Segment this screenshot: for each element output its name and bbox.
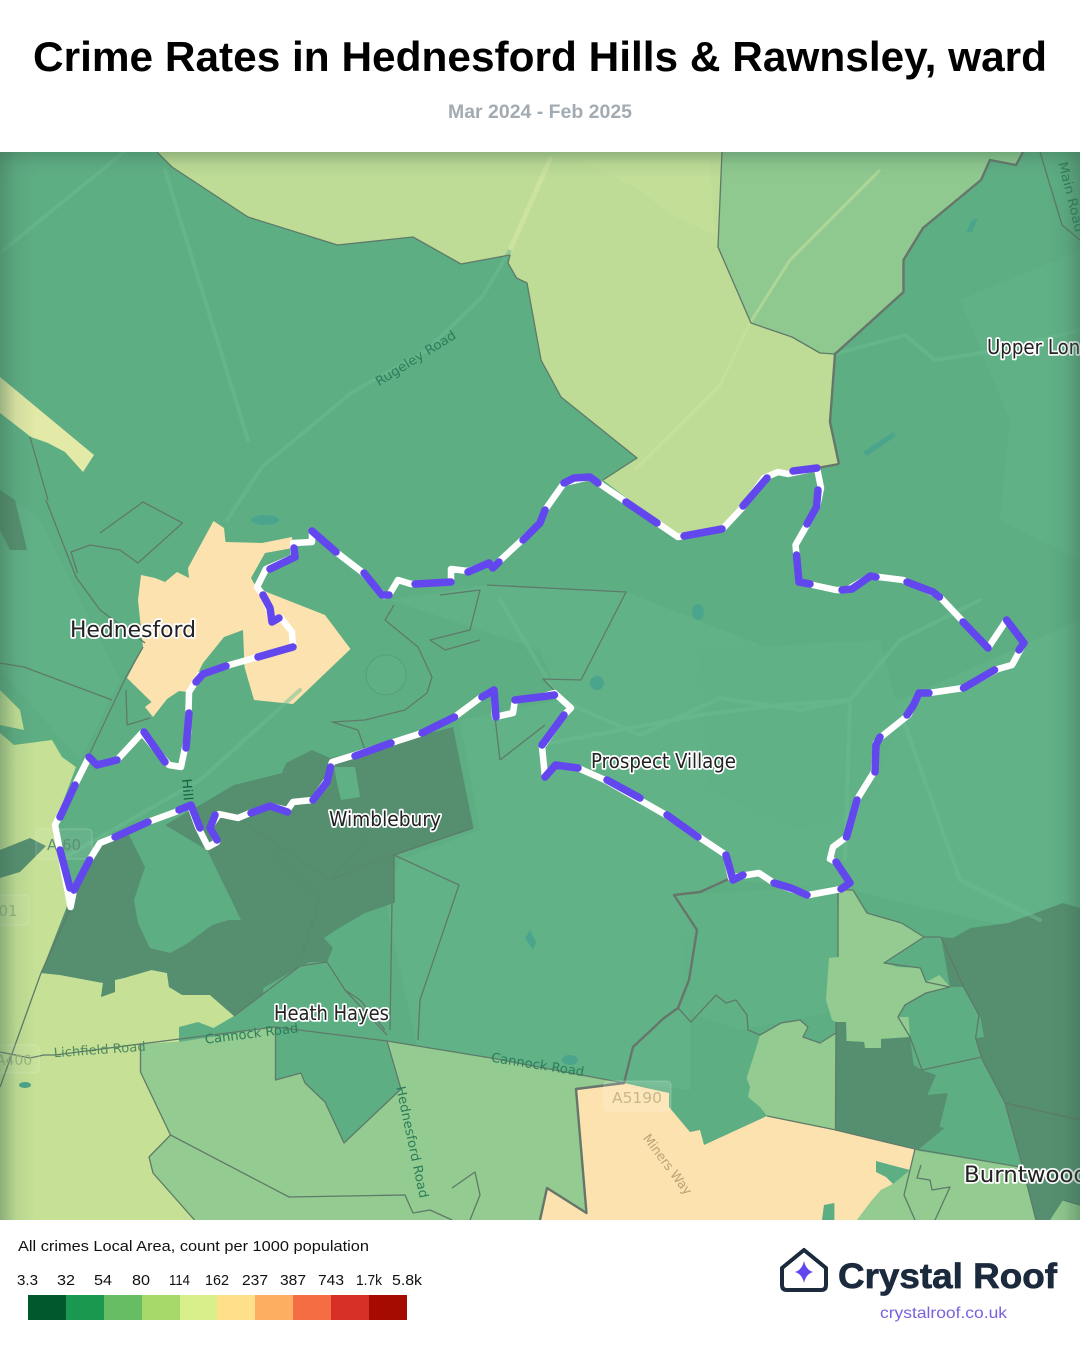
road label: Rugeley Road: Rugeley Road	[373, 328, 459, 390]
legend value labels	[17, 1272, 423, 1289]
area: south-east cream	[540, 1083, 915, 1220]
area: left and lower-left yellow-green	[0, 733, 234, 1220]
road label: Hednesford Road: Hednesford Road	[392, 1085, 431, 1200]
area: Wimblebury dark green	[41, 727, 474, 1016]
lighter green area: centre and south	[385, 585, 1080, 1090]
title: Crime Rates in Hednesford Hills & Rawnsley, ward	[33, 33, 1047, 80]
subtitle: date range: Mar 2024 - Feb 2025	[448, 102, 632, 123]
legend value labels: 5.8k	[392, 1272, 423, 1289]
road label: Hill: Hill	[178, 778, 195, 801]
thick district boundaries	[540, 152, 1023, 1220]
legend	[17, 1238, 423, 1320]
roundabout circle	[366, 655, 406, 695]
area: east dark green	[836, 1022, 948, 1149]
legend value labels: 162	[205, 1272, 229, 1289]
legend value labels: 32	[57, 1272, 75, 1289]
road label: Lichfield Road: Lichfield Road	[53, 1040, 146, 1061]
legend value labels: 54	[94, 1272, 112, 1289]
road shield A460	[36, 829, 92, 859]
water spots	[19, 218, 978, 1088]
legend value labels: 743	[318, 1272, 344, 1289]
road shield A400	[0, 1045, 39, 1073]
legend value labels: 3.3	[17, 1272, 38, 1289]
area: Hednesford cream	[127, 521, 350, 717]
map	[0, 152, 1080, 1220]
legend value labels: 80	[132, 1272, 150, 1289]
road shield A460: A 60	[47, 836, 81, 854]
road label: Cannock Road east: Cannock Road	[490, 1051, 585, 1080]
place label: Burntwood: Burntwood	[964, 1163, 1080, 1188]
place label: Heath Hayes: Heath Hayes	[274, 1001, 389, 1025]
area: left sliver pale yellow	[0, 377, 94, 472]
place label: Wimblebury: Wimblebury	[329, 807, 441, 831]
legend value labels: 114	[169, 1272, 190, 1289]
logo URL: crystalroof.co.uk	[880, 1305, 1008, 1322]
road shield A-road left	[0, 895, 29, 925]
legend value labels: 387	[280, 1272, 306, 1289]
ward outline purple dashes	[60, 468, 1024, 895]
area: top yellow-green	[157, 152, 839, 537]
icon: house with star	[782, 1250, 826, 1290]
road label: Miners Way: Miners Way	[639, 1132, 695, 1198]
road label: Cannock Road west: Cannock Road	[204, 1021, 299, 1048]
district boundaries	[0, 152, 1080, 1220]
logo wordmark: Crystal Roof	[838, 1257, 1057, 1296]
place label: Prospect Village: Prospect Village	[591, 749, 736, 773]
area: east mid green patches	[826, 890, 950, 1048]
roads	[58, 249, 1042, 922]
road shield A5190	[604, 1081, 671, 1111]
place label: Hednesford: Hednesford	[70, 618, 196, 643]
ward outline white	[55, 468, 1024, 907]
area: south mid green	[140, 1027, 624, 1220]
legend title: All crimes Local Area, count per 1000 population	[18, 1238, 369, 1255]
area: top-right mid green	[718, 152, 1023, 354]
legend value labels: 237	[242, 1272, 268, 1289]
logo: Crystal Roof	[782, 1250, 1057, 1322]
legend value labels: 1.7k	[356, 1272, 382, 1289]
legend colour scale	[28, 1295, 407, 1320]
map edge shading	[0, 152, 1080, 1220]
road shield A5190: A5190	[612, 1089, 662, 1107]
ward boundary: Hednesford Hills & Rawnsley	[55, 468, 1024, 907]
